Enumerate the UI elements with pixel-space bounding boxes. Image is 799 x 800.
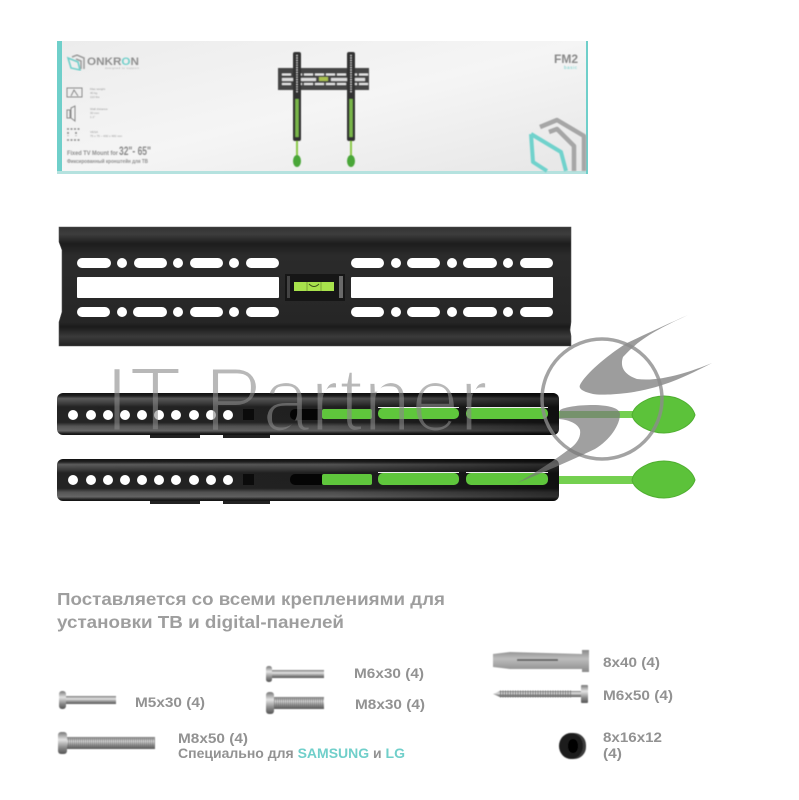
brand logo [68, 55, 139, 70]
model label: basic [564, 65, 578, 70]
model label: FM2 [554, 52, 578, 66]
spec list [67, 87, 123, 140]
label 8x16x12: (4) [603, 745, 622, 761]
large logo [531, 120, 584, 171]
lower bracket arm [57, 459, 695, 504]
accessories heading [57, 589, 445, 632]
upper bracket arm [57, 393, 695, 438]
label M6x30: M6x30 (4) [354, 665, 424, 681]
screw M6x30 [266, 666, 324, 682]
strap [555, 411, 640, 418]
spec list: Max weight [90, 87, 105, 91]
spec list: VESA [90, 130, 98, 134]
screw M8x50 [58, 732, 155, 754]
package headline [67, 144, 151, 165]
lag screw M6x50 [493, 685, 588, 703]
spacer 8x16x12 [559, 733, 586, 759]
label 8x16x12: 8x16x12 [603, 729, 662, 745]
spec list: 1.1" [90, 115, 95, 119]
bubble level [285, 274, 345, 301]
label M6x50: M6x50 (4) [603, 687, 673, 703]
label M8x50: M8x50 (4) [178, 730, 248, 746]
spec list: Wall distance [90, 107, 108, 111]
label M5x30: M5x30 (4) [135, 694, 205, 710]
brand logo: ONKRON [87, 56, 139, 68]
package headline: Фиксированный кронштейн для ТВ [67, 158, 148, 165]
label 8x16x12 [603, 729, 662, 761]
watermark: IT Partner [105, 349, 488, 451]
green leaf tab [632, 396, 695, 433]
wall anchor 8x40 [493, 650, 589, 672]
spec list: 75 x 75 – 400 x 400 mm [90, 134, 123, 138]
accessories heading: установки ТВ и digital-панелей [57, 612, 344, 632]
packaging box [57, 41, 588, 174]
watermark [105, 315, 712, 483]
label 8x40: 8x40 (4) [603, 654, 660, 670]
accessories heading: Поставляется со всеми креплениями для [57, 589, 445, 609]
spec list: 40 kg [90, 91, 98, 95]
package headline: 32"- 65" [119, 144, 151, 158]
screw M5x30 [59, 691, 116, 709]
label M8x30: M8x30 (4) [355, 696, 425, 712]
package headline: Fixed TV Mount for [67, 150, 118, 157]
wall plate [59, 227, 571, 346]
brand logo: designed to support [105, 66, 139, 70]
spec list: 30 mm [90, 111, 100, 115]
screw M8x30 [266, 692, 324, 714]
green leaf tab [632, 461, 695, 498]
label M8x50: Специально для SAMSUNG и LG [178, 745, 405, 761]
mini mount [278, 52, 369, 167]
spec list: 110 lbs [90, 95, 100, 99]
strap [555, 476, 640, 484]
label M8x50 [178, 730, 405, 761]
